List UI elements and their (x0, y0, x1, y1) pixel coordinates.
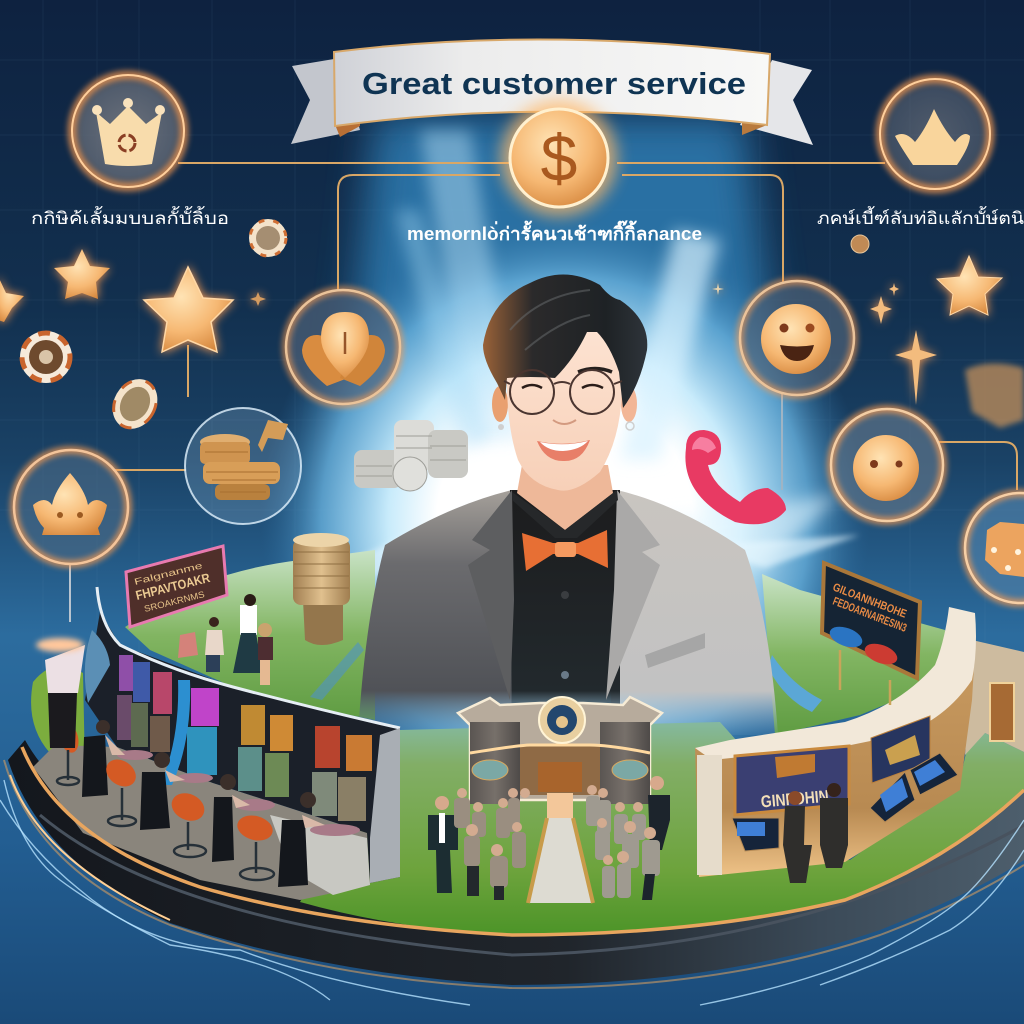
entrance doors (520, 745, 600, 795)
second screen (871, 716, 930, 783)
left neon sign: Falgnanme (133, 560, 203, 587)
smiley badge top right (740, 281, 854, 395)
standing attendant (48, 693, 77, 748)
left stream (310, 642, 364, 700)
front column (697, 755, 722, 875)
hair (483, 274, 647, 408)
carpet (528, 818, 593, 903)
buttons (561, 591, 569, 599)
slot machine bank (36, 587, 400, 895)
centre and right lawn (300, 722, 1024, 935)
left neon sign: FHPAVTOAKR (134, 570, 212, 603)
central light glow (200, 115, 940, 790)
silver coins (354, 420, 468, 491)
centre caption: memornlò่ก่ารั้คนวเช้าฑกิ๊กิ้ลกance (407, 220, 702, 244)
right hill billboard: FEDOARNAIRESIN3 (831, 596, 908, 635)
lounge wall (695, 650, 975, 877)
crowd left (428, 788, 530, 900)
curved wall (85, 612, 400, 883)
main screen (735, 746, 849, 815)
back hill right (762, 574, 945, 735)
platform road band (8, 740, 1024, 985)
crown badge lower left (14, 450, 128, 564)
stairs (547, 793, 573, 818)
blurred icon top right (965, 363, 1024, 428)
eyebrow (578, 368, 612, 372)
player heads (96, 720, 316, 808)
side screens (472, 760, 508, 780)
crown badge left (72, 75, 184, 187)
coin bubble (185, 408, 301, 524)
face (507, 325, 622, 491)
counter base (270, 815, 370, 895)
pocket (645, 633, 705, 668)
right stream (768, 655, 822, 712)
wall top edge (97, 587, 400, 728)
left neon sign (126, 546, 227, 627)
ears (492, 386, 508, 422)
stool bases (57, 750, 274, 880)
left lawn (31, 666, 85, 770)
left neon sign: SROAKRNMS (143, 589, 206, 614)
gaming lounge building: GINFOHIN (760, 787, 830, 812)
right hill billboard (822, 563, 920, 705)
right hill billboard: GILOANNHBOHE (831, 582, 908, 621)
terminals (732, 753, 958, 851)
dice badge (965, 493, 1024, 603)
seated players (82, 735, 308, 887)
dollar coin (501, 100, 617, 216)
nose (553, 420, 576, 424)
bow tie (522, 530, 608, 571)
wall end panel (370, 728, 400, 883)
coin tower (293, 533, 350, 645)
glasses (504, 370, 622, 414)
machine screens (85, 630, 372, 821)
right caption: ภคษ์เบี้ฑ์ลับท่อิแลักบั้ษ์ตนิ (817, 206, 1024, 228)
energy lines (0, 780, 1024, 1005)
crown badge right (880, 79, 990, 189)
casino chips (20, 219, 869, 437)
host portrait (358, 274, 778, 735)
entrance emblem (539, 697, 585, 743)
lower platform edge (4, 760, 1024, 988)
eyes (522, 385, 603, 388)
ribbon main band (334, 39, 770, 126)
gold trim (470, 745, 650, 753)
crowd right (586, 776, 670, 900)
title ribbon (291, 39, 813, 145)
ribbon right tail (740, 60, 813, 145)
lapels (468, 490, 514, 700)
back hill left (125, 550, 375, 720)
gold rim (22, 747, 1024, 935)
left caption: กกิษิค้เลั้มมบบลกั้บั้ลิ้บอ (31, 206, 229, 228)
connector lines (70, 163, 1017, 622)
casino entrance building (458, 697, 662, 903)
rim highlight left (10, 775, 170, 920)
hair strands (510, 290, 590, 350)
cornice (695, 607, 976, 760)
lounge far wing (965, 640, 1024, 755)
stars (0, 249, 1002, 405)
entrance towers (470, 722, 520, 804)
dollar coin: $ (541, 121, 577, 195)
earrings (498, 424, 504, 430)
suit (358, 490, 512, 735)
red telephone icon (685, 430, 786, 524)
floor (33, 745, 370, 900)
collar (512, 490, 618, 538)
smiley badge lower right (831, 409, 943, 521)
circular platform (4, 666, 1024, 988)
orange stools (56, 721, 275, 844)
shirt (510, 490, 620, 735)
neck (517, 465, 613, 530)
balloon badge (286, 290, 400, 404)
player trays (117, 750, 360, 836)
entrance roof and facade (458, 697, 662, 800)
gaming lounge building (695, 607, 1024, 883)
people on back hill (178, 594, 273, 685)
title text: Great customer service (362, 66, 746, 101)
ribbon left tail (291, 58, 360, 144)
billboard post (840, 650, 890, 705)
smile (537, 440, 590, 461)
guests at terminal (783, 806, 812, 883)
